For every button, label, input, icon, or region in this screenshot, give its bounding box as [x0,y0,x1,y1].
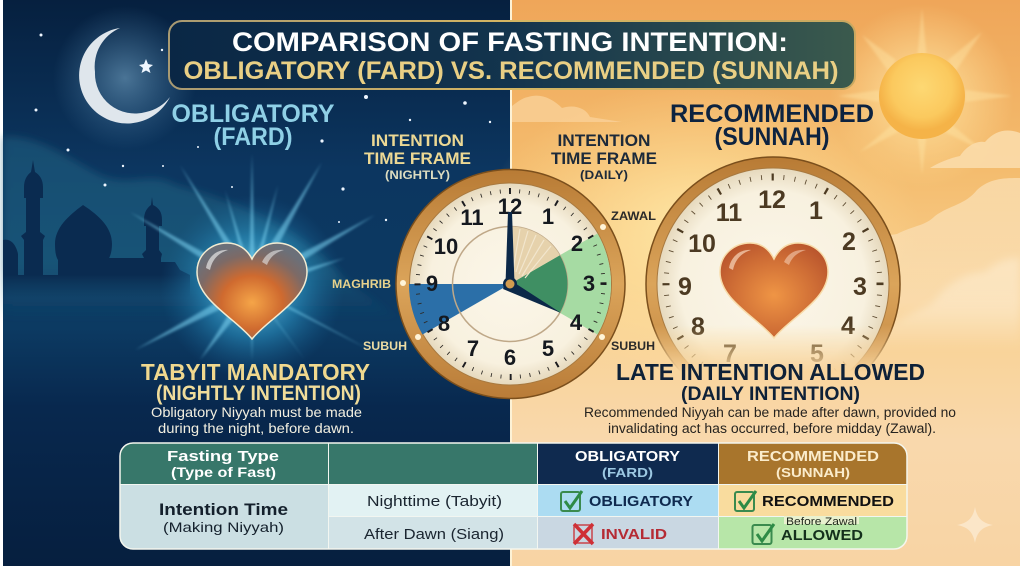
title banner [169,21,855,89]
row label: nighttime: Nighttime (Tabyit) [367,494,502,510]
clock numerals: 11 [716,199,742,227]
cell: invalid cross [574,524,667,544]
clock numerals [426,194,595,370]
clock: recommended [645,156,901,370]
text: late intention allowed [584,359,956,436]
clock numerals: 10 [688,230,716,258]
clock: obligatory time frame [396,170,625,398]
icon: sparkle [957,507,993,543]
table header: obligatory [575,449,680,480]
clock numerals: 11 [460,205,484,230]
clock numerals: 5 [542,336,554,361]
clock labels: SUBUH [611,341,655,353]
clock labels: ZAWAL [611,211,656,223]
text: tabyit mandatory: (NIGHTLY INTENTION) [156,382,361,405]
clock numerals: 10 [434,234,458,259]
table header: recommended [747,449,879,480]
cell: invalid cross: INVALID [601,526,667,543]
row label: intention time: (Making Niyyah) [163,519,284,535]
comparison table [120,443,907,549]
clock labels: SUBUH [363,341,407,353]
row label: intention time: Intention Time [159,500,288,519]
clock numerals: 7 [723,340,737,368]
heading: obligatory: (FARD) [214,123,292,151]
panel: night background [3,0,510,566]
clock numerals: 3 [583,271,595,296]
row label: intention time [159,500,288,535]
clock numerals: 5 [810,340,824,368]
cell: allowed check: ALLOWED [781,527,863,544]
text: late intention allowed: (DAILY INTENTION) [681,384,860,405]
cell: recommended check: RECOMMENDED [762,493,894,510]
icon: crescent moon [53,6,197,150]
heading: recommended: (SUNNAH) [714,123,830,151]
text: tabyit mandatory: during the night, before dawn. [158,420,354,436]
clock numerals: 3 [853,273,867,301]
clock numerals: 1 [542,204,554,229]
cell: allowed check [752,516,863,544]
sector: daily light green [510,234,611,334]
clock numerals: 7 [467,336,479,361]
text: tabyit mandatory: TABYIT MANDATORY [141,359,370,385]
sector: daily dark green [510,255,568,313]
cell: recommended check [735,491,894,511]
label: intention time frame daily: TIME FRAME [551,150,657,168]
label: intention time frame daily: INTENTION [558,132,650,150]
clock numerals: 12 [498,194,522,219]
table header: fasting type: Fasting Type [167,448,279,465]
icon: mosque silhouette [3,160,190,298]
label: intention time frame nightly [364,132,471,182]
row label: after dawn: After Dawn (Siang) [364,527,504,543]
table header: fasting type [167,448,279,480]
title line 2: OBLIGATORY (FARD) VS. RECOMMENDED (SUNNAH) [184,57,838,85]
clock numerals: 9 [678,273,692,301]
heading: obligatory [172,100,335,151]
icon: glowing heart with rays [130,153,375,379]
table header: fasting type: (Type of Fast) [171,465,276,480]
sector: nighttime blue [409,284,510,334]
icon: heart recommended [720,243,828,338]
icon: clouds [512,96,1020,355]
text: tabyit mandatory: Obligatory Niyyah must be made [151,404,362,420]
cell: obligatory check: OBLIGATORY [589,493,693,510]
cell: obligatory check [561,491,693,511]
clock numerals: 8 [438,311,450,336]
clock numerals: 12 [758,186,786,214]
heading: recommended [670,100,874,151]
table header: recommended: (SUNNAH) [776,465,850,480]
heading: recommended: RECOMMENDED [670,100,874,128]
cell: allowed check: Before Zawal [786,516,857,528]
text: late intention allowed: LATE INTENTION ALLOWED [616,359,925,385]
clock hands [503,212,561,313]
clock labels [332,211,656,353]
clock numerals: 4 [841,312,855,340]
label: intention time frame daily [551,132,657,182]
table header: recommended: RECOMMENDED [747,449,879,465]
clock numerals [678,186,867,368]
clock numerals: 2 [842,228,856,256]
label: intention time frame daily: (DAILY) [580,168,628,182]
panel: day background [480,0,1020,566]
text: tabyit mandatory [141,359,370,436]
table header: obligatory: (FARD) [602,465,653,480]
icon: sun [830,4,1014,188]
clock numerals: 8 [691,313,705,341]
clock numerals: 9 [426,271,438,296]
sector: hatched tan [510,226,560,284]
heading: obligatory: OBLIGATORY [172,100,335,128]
text: late intention allowed: Recommended Niyyah can be made after dawn, provided no [584,405,956,420]
table header: obligatory: OBLIGATORY [575,449,680,465]
clock numerals: 1 [809,197,823,225]
text: late intention allowed: invalidating act has occurred, before midday (Zawal). [608,421,936,436]
clock numerals: 6 [504,345,516,370]
label: intention time frame nightly: INTENTION [371,132,464,150]
label: intention time frame nightly: (NIGHTLY) [385,168,450,182]
clock numerals: 2 [571,231,583,256]
clock labels: MAGHRIB [332,279,391,291]
clock numerals: 4 [570,310,583,335]
label: intention time frame nightly: TIME FRAME [364,150,471,168]
rim markers [400,224,606,340]
title line 1: COMPARISON OF FASTING INTENTION: [232,27,788,57]
icon: stars [34,34,491,223]
